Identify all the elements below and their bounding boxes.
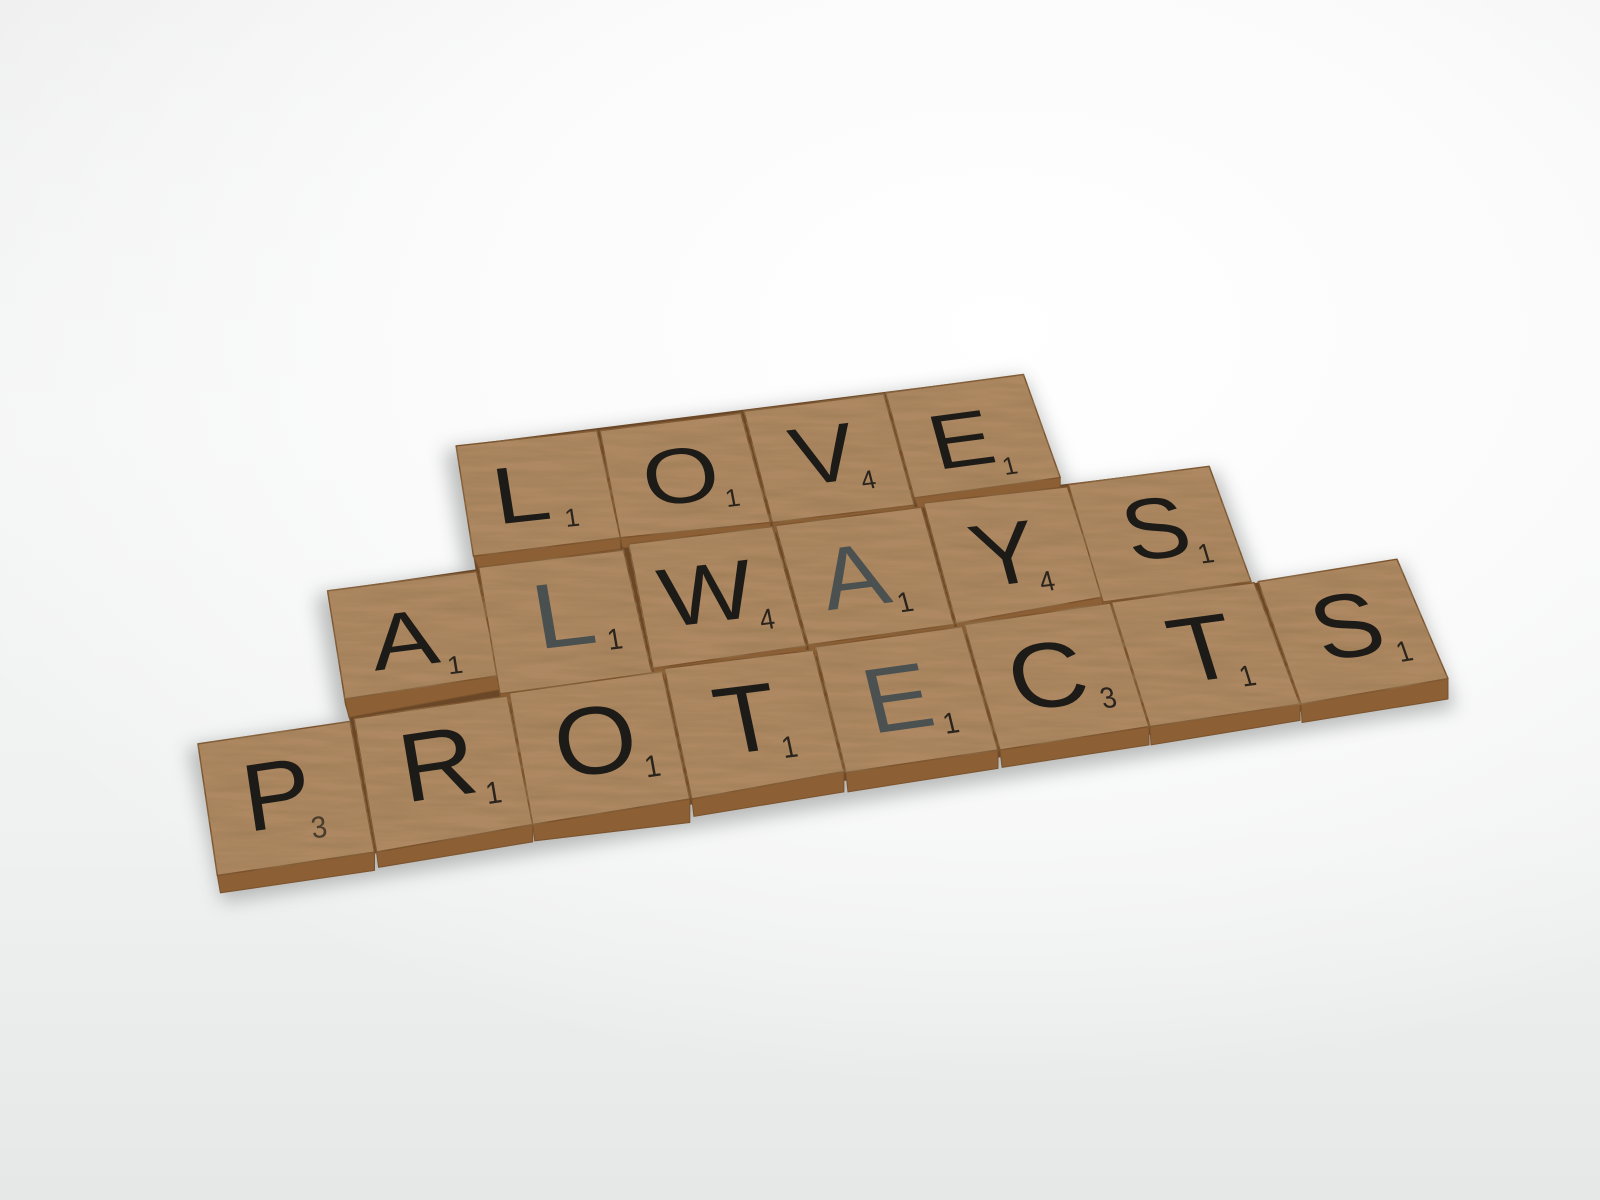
tile: W: W bbox=[651, 543, 763, 645]
tile: O bbox=[600, 413, 770, 548]
tile: L: L bbox=[486, 447, 556, 542]
tile: R: R bbox=[391, 705, 485, 823]
tile: O: O bbox=[635, 428, 727, 523]
tile: Y: Y bbox=[960, 501, 1051, 606]
tile: T: T bbox=[705, 662, 789, 775]
tile: L bbox=[456, 431, 620, 568]
tile: P: 3 bbox=[309, 810, 329, 846]
tile: A: A bbox=[807, 525, 899, 629]
tile: O: 1 bbox=[642, 749, 663, 785]
tile: A: A bbox=[364, 592, 445, 688]
tile: E: 1 bbox=[940, 707, 962, 741]
tile: C bbox=[964, 603, 1149, 767]
tile: E: E bbox=[852, 642, 943, 753]
tile: P bbox=[198, 721, 374, 893]
tile base: dark seams between tiles bbox=[198, 374, 1448, 878]
tile: L bbox=[479, 550, 652, 706]
tile: A bbox=[328, 571, 499, 717]
tile: A bbox=[776, 507, 954, 657]
tile row: PROTECTS bbox=[198, 559, 1448, 893]
tile: T: 1 bbox=[779, 731, 801, 765]
tile: P: P bbox=[235, 737, 319, 853]
tile: S bbox=[1258, 559, 1448, 722]
tile: S: 1 bbox=[1392, 635, 1417, 668]
tile: O: 1 bbox=[723, 484, 742, 513]
tile: A: 1 bbox=[893, 586, 917, 618]
tile: L: L bbox=[524, 559, 603, 669]
tile row: LOVE bbox=[456, 374, 1060, 568]
tile: S: S bbox=[1296, 571, 1398, 681]
tile: Y bbox=[923, 487, 1103, 636]
tile: R: 1 bbox=[483, 775, 504, 811]
tile: O bbox=[509, 671, 690, 841]
tile: V bbox=[744, 394, 914, 533]
tile: Y: 4 bbox=[1035, 565, 1059, 597]
tile: O: O bbox=[545, 682, 646, 799]
tile: E: E bbox=[919, 394, 1004, 486]
tile: C: C bbox=[995, 620, 1100, 732]
tile: V: 4 bbox=[857, 464, 879, 495]
tile: V: V bbox=[781, 405, 868, 503]
tile: S: S bbox=[1110, 477, 1202, 580]
tile: L: 1 bbox=[563, 504, 581, 533]
tile: S bbox=[1068, 466, 1251, 614]
tile: S: 1 bbox=[1194, 537, 1217, 570]
tile: L: 1 bbox=[605, 621, 625, 656]
tile: E bbox=[886, 374, 1060, 508]
tile: W bbox=[629, 527, 806, 681]
tile: A: 1 bbox=[445, 650, 465, 680]
shadow beneath tiles bbox=[188, 378, 1456, 902]
tile: T bbox=[1111, 583, 1300, 745]
tile: T bbox=[664, 650, 844, 816]
tile: E: 1 bbox=[999, 452, 1021, 481]
tile: E bbox=[815, 627, 998, 792]
tile: C: 3 bbox=[1096, 681, 1121, 716]
tile row: ALWAYS bbox=[328, 466, 1251, 717]
tile: T: 1 bbox=[1235, 658, 1260, 693]
tile: W: 4 bbox=[757, 602, 778, 636]
tile: R bbox=[354, 696, 533, 867]
tile: T: T bbox=[1156, 593, 1250, 702]
